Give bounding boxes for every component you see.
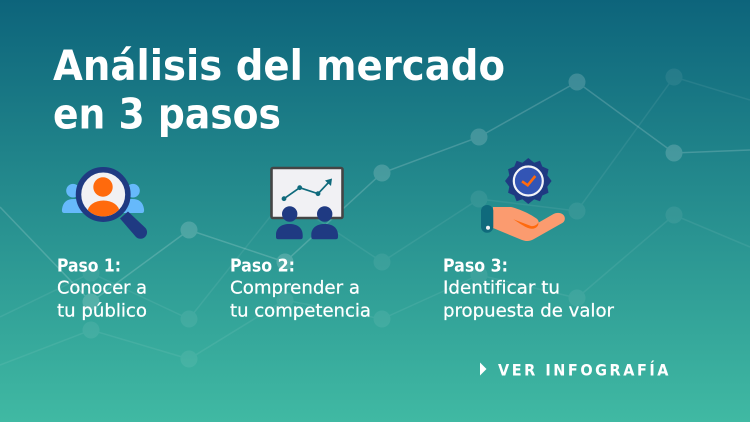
audience silhouettes	[62, 184, 144, 213]
arrow	[480, 362, 486, 376]
step 3 text: Identificar tu	[443, 278, 560, 298]
icon: magnifying glass over audience	[62, 170, 147, 239]
step 2 text: tu competencia	[230, 302, 371, 322]
badge	[505, 158, 552, 204]
link label: VER INFOGRAFÍA	[498, 360, 671, 379]
step 2 text: Comprender a	[230, 278, 360, 298]
magnifier lens	[78, 170, 128, 219]
step 1 text: Conocer a	[57, 278, 147, 298]
step 2 text	[230, 256, 371, 322]
step 3 text	[443, 256, 615, 322]
icon: hand holding quality badge	[481, 158, 565, 241]
title	[53, 41, 505, 138]
hand	[493, 207, 565, 241]
magnifier handle	[120, 212, 147, 239]
icon: presentation screen with audience	[272, 168, 342, 239]
background line chart	[0, 68, 750, 368]
audience members	[276, 206, 338, 239]
rising line chart	[282, 178, 332, 201]
step 1 text: Paso 1:	[57, 256, 121, 276]
faint data series lower	[0, 206, 750, 368]
palm crease	[513, 219, 538, 229]
call to action	[480, 360, 671, 379]
step 1 text: tu público	[57, 302, 147, 322]
cuff button	[486, 226, 490, 230]
title: Análisis del mercado	[53, 41, 505, 90]
screen	[272, 168, 342, 218]
cuff	[481, 205, 493, 233]
bright data series	[0, 74, 750, 310]
step 3 text: propuesta de valor	[443, 302, 615, 322]
person in lens	[88, 177, 119, 216]
faint data series upper	[0, 68, 750, 328]
step 2 text: Paso 2:	[230, 256, 295, 276]
check mark	[522, 176, 535, 185]
step 3 text: Paso 3:	[443, 256, 508, 276]
title: en 3 pasos	[53, 90, 281, 138]
step 1 text	[57, 256, 147, 322]
